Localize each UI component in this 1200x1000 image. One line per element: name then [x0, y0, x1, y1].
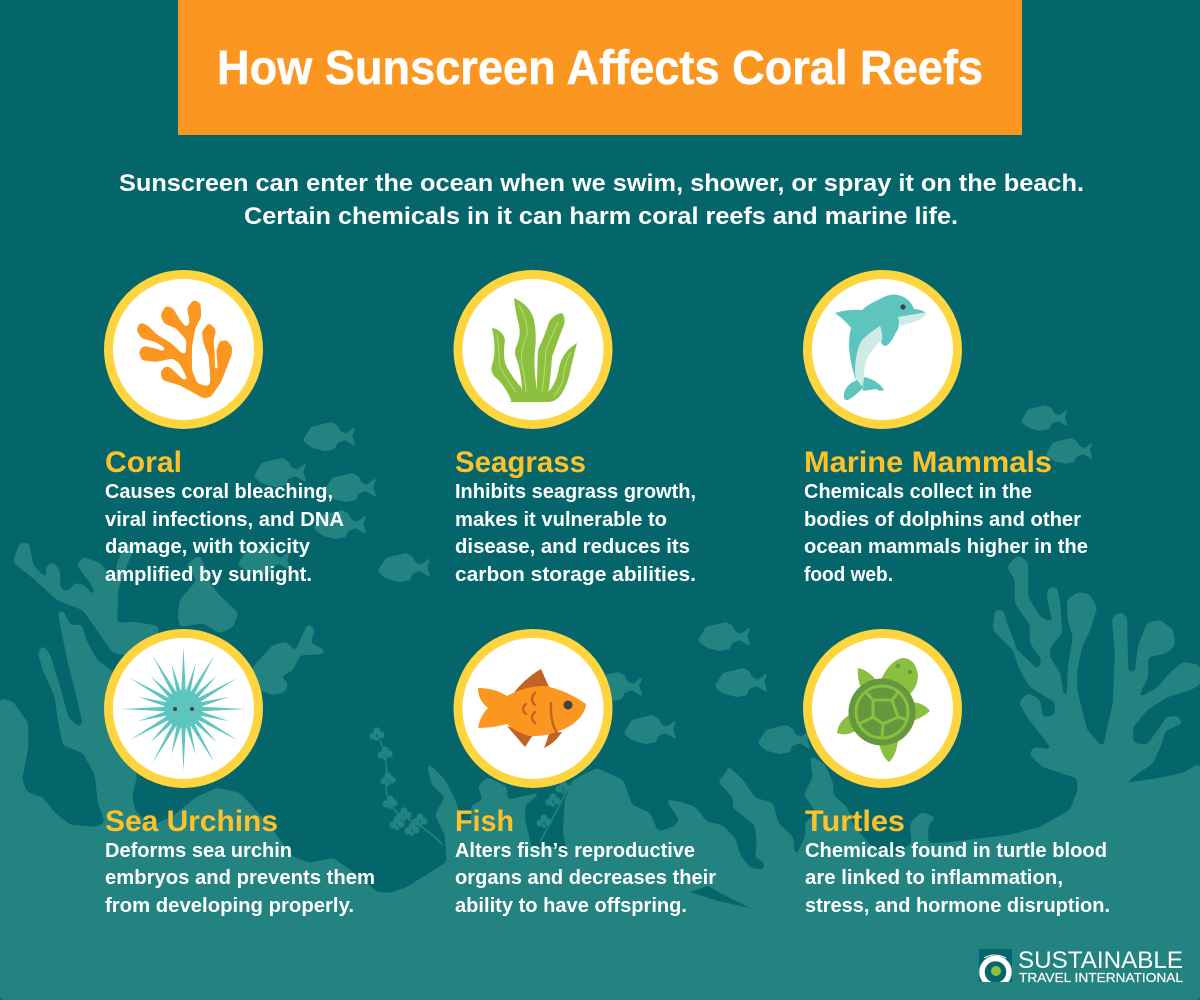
description: marine mammals: Chemicals collect in the [804, 481, 1032, 503]
description: sea urchins [105, 840, 375, 917]
icon: sea urchin [108, 634, 258, 784]
description: seagrass: Inhibits seagrass growth, [455, 481, 696, 503]
icon: dolphin [808, 274, 958, 424]
title banner: How Sunscreen Affects Coral Reefs [217, 42, 983, 95]
heading: seagrass: Seagrass [455, 446, 586, 479]
description: fish: Alters fish’s reproductive [455, 840, 695, 862]
intro text: Certain chemicals in it can harm coral reefs and marine life. [244, 203, 958, 230]
panel: fish [455, 634, 716, 917]
description: turtles: stress, and hormone disruption. [805, 895, 1110, 917]
description: coral: damage, with toxicity [105, 536, 311, 558]
heading: turtles: Turtles [805, 805, 905, 838]
description: coral: viral infections, and DNA [105, 509, 344, 531]
description: marine mammals: bodies of dolphins and other [804, 509, 1081, 531]
heading: fish: Fish [455, 805, 514, 838]
description: fish: ability to have offspring. [455, 895, 687, 917]
description: coral [105, 481, 344, 586]
description: marine mammals: food web. [804, 564, 893, 586]
description: seagrass: carbon storage abilities. [455, 564, 696, 586]
description: fish: organs and decreases their [455, 867, 716, 889]
background plant left of fish [369, 727, 443, 845]
panel: turtles [805, 634, 1110, 917]
icon: seagrass [458, 274, 608, 424]
description: turtles [805, 840, 1110, 917]
icon: coral [108, 274, 258, 424]
icon: turtle [808, 634, 958, 784]
description: seagrass: disease, and reduces its [455, 536, 690, 558]
logo: sustainable travel international: SUSTAINABLE [1018, 947, 1183, 974]
logo: sustainable travel international [979, 949, 1183, 982]
description: sea urchins: Deforms sea urchin [105, 840, 292, 862]
intro text: Sunscreen can enter the ocean when we swim, shower, or spray it on the beach. [119, 170, 1084, 197]
description: sea urchins: embryos and prevents them [105, 867, 375, 889]
panel: sea urchins [105, 634, 375, 917]
intro text [119, 170, 1084, 230]
description: turtles: Chemicals found in turtle blood [805, 840, 1107, 862]
panel: marine mammals [804, 274, 1088, 586]
heading: coral: Coral [105, 446, 182, 479]
description: seagrass: makes it vulnerable to [455, 509, 667, 531]
description: fish [455, 840, 716, 917]
description: coral: amplified by sunlight. [105, 564, 312, 586]
title banner [178, 0, 1022, 135]
background fish school [238, 405, 1093, 754]
panel: coral [105, 274, 344, 586]
background reef silhouettes [0, 543, 1200, 1000]
dark sliver under kelp [690, 886, 750, 908]
description: turtles: are linked to inflammation, [805, 867, 1063, 889]
description: coral: Causes coral bleaching, [105, 481, 333, 503]
icon: goldfish [458, 634, 608, 784]
background plant right of fish text [536, 780, 571, 842]
panel: seagrass [455, 274, 696, 586]
description: seagrass [455, 481, 696, 586]
heading: marine mammals: Marine Mammals [804, 446, 1052, 479]
heading: sea urchins: Sea Urchins [105, 805, 278, 838]
description: sea urchins: from developing properly. [105, 895, 354, 917]
logo: sustainable travel international: TRAVEL INTERNATIONAL [1019, 970, 1183, 985]
description: marine mammals [804, 481, 1088, 586]
description: marine mammals: ocean mammals higher in the [804, 536, 1088, 558]
